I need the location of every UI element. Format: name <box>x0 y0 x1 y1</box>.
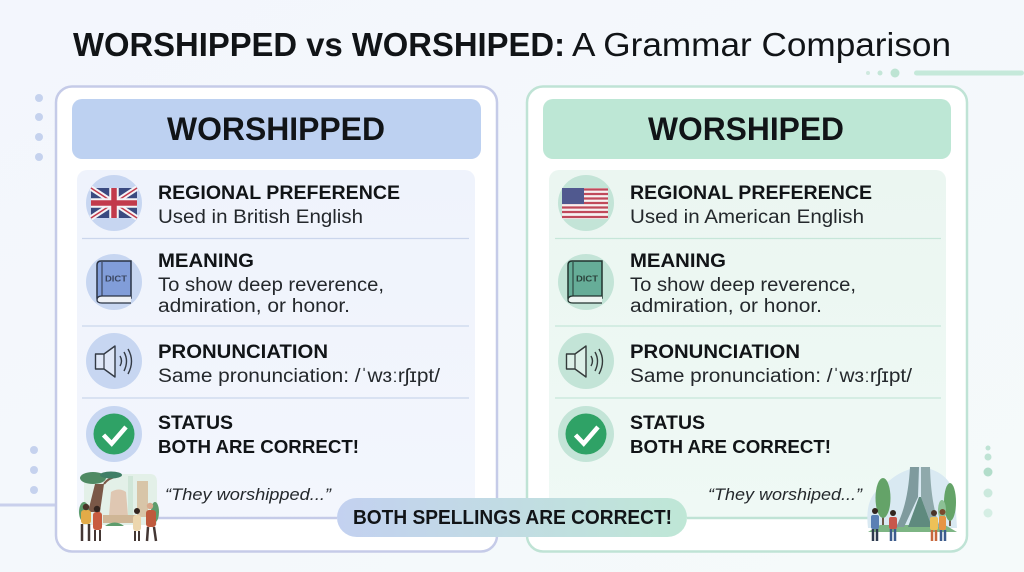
title <box>73 26 951 63</box>
text: status <box>158 413 359 457</box>
example quote: “They worshiped...” <box>708 485 863 504</box>
panel heading: WORSHIPPED: WORSHIPPED <box>167 111 385 147</box>
text: pronunciation <box>158 342 441 387</box>
details card: WORSHIPPED <box>77 170 475 518</box>
text: status: STATUS <box>630 413 705 434</box>
text: meaning: MEANING <box>630 251 726 272</box>
banner: both spellings are correct <box>337 498 687 537</box>
text: status <box>630 413 831 457</box>
panel: WORSHIPPED <box>56 86 497 552</box>
text: regional preference <box>158 183 400 228</box>
icon: dictionary <box>86 254 142 310</box>
text: meaning: admiration, or honor. <box>158 296 350 317</box>
text: pronunciation <box>630 342 913 387</box>
text: regional preference: REGIONAL PREFERENCE <box>630 183 872 204</box>
icon: speaker <box>86 333 142 389</box>
text: regional preference: REGIONAL PREFERENCE <box>158 183 400 204</box>
panel heading: WORSHIPED: WORSHIPED <box>648 111 844 147</box>
text: meaning <box>158 251 384 317</box>
title: A Grammar Comparison <box>572 26 951 63</box>
text: pronunciation: PRONUNCIATION <box>158 342 328 363</box>
text: status: BOTH ARE CORRECT! <box>630 436 831 457</box>
panel heading: WORSHIPED <box>543 99 951 159</box>
banner: both spellings are correct: BOTH SPELLINGS ARE CORRECT! <box>353 507 672 529</box>
icon: speaker <box>558 333 614 389</box>
text: pronunciation: Same pronunciation: /ˈwɜːrʃɪpt/ <box>158 366 441 387</box>
icon: dictionary: DICT <box>576 274 599 284</box>
text: pronunciation: PRONUNCIATION <box>630 342 800 363</box>
text: pronunciation: Same pronunciation: /ˈwɜːrʃɪpt/ <box>630 366 913 387</box>
text: regional preference <box>630 183 872 228</box>
icon: check mark <box>86 406 142 462</box>
text: meaning: To show deep reverence, <box>630 275 856 296</box>
illustration: visitors at ancient ruins <box>79 472 159 541</box>
panel: WORSHIPED <box>527 86 967 552</box>
icon: dictionary: DICT <box>105 274 128 284</box>
panel heading: WORSHIPPED <box>72 99 481 159</box>
icon: dictionary <box>558 254 614 310</box>
illustration: visitors at a modern monument <box>867 467 957 541</box>
icon: US flag <box>558 175 614 231</box>
text: meaning: MEANING <box>158 251 254 272</box>
title: WORSHIPPED vs WORSHIPED: <box>73 26 565 63</box>
text: status: BOTH ARE CORRECT! <box>158 436 359 457</box>
text: meaning <box>630 251 856 317</box>
icon: UK flag <box>86 175 142 231</box>
text: regional preference: Used in American English <box>630 207 864 228</box>
text: meaning: admiration, or honor. <box>630 296 822 317</box>
text: regional preference: Used in British English <box>158 207 363 228</box>
details card: WORSHIPED <box>549 170 946 518</box>
example quote: “They worshipped...” <box>165 485 332 504</box>
text: status: STATUS <box>158 413 233 434</box>
text: meaning: To show deep reverence, <box>158 275 384 296</box>
icon: check mark <box>558 406 614 462</box>
